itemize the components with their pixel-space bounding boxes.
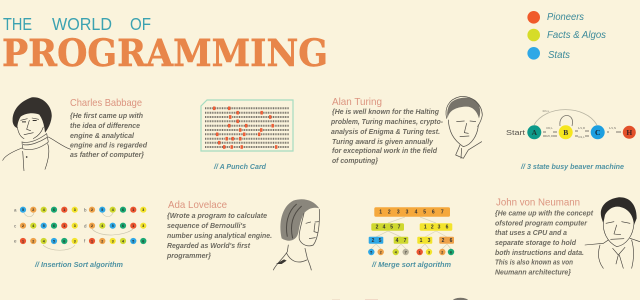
chart: insertion sort steps: 5 <box>22 208 24 212</box>
arrow: B self loop <box>560 116 573 126</box>
arrow: A to C arc <box>534 110 597 125</box>
chart: insertion sort steps: 4 <box>112 208 114 212</box>
chart: insertion sort steps: e <box>14 238 17 244</box>
chart: insertion sort steps: 4 <box>43 239 45 243</box>
transition labels: 1/1,N <box>609 126 616 130</box>
chart: merge sort tree: 2 <box>431 225 434 231</box>
state nodes <box>527 125 636 139</box>
chart: insertion sort steps: 4 <box>101 224 103 228</box>
chart: merge sort tree: 2 <box>388 210 391 216</box>
text block: Lovelace bio <box>166 211 272 260</box>
title: WORLD <box>52 14 112 34</box>
text block: Turing bio: problem, Turing machines, crypto- <box>330 117 443 126</box>
chart: merge sort tree: 1 <box>424 225 427 231</box>
chart: merge sort tree: 5 <box>423 210 426 216</box>
chart: insertion sort steps: 1 <box>132 224 134 228</box>
icon: portrait of Turing <box>446 97 482 158</box>
chart: merge sort tree: 5 <box>390 225 393 231</box>
transition labels <box>543 109 616 139</box>
text block: Babbage bio: {He first came up with <box>70 111 143 120</box>
panel: Charles Babbage <box>3 97 147 171</box>
text block: Lovelace bio: number using analytical engine. <box>167 231 272 240</box>
chart: merge sort tree: 7 <box>405 250 407 254</box>
chart: insertion sort steps: 6 <box>63 239 65 243</box>
chart: merge sort tree: 7 <box>441 210 444 216</box>
chart: merge sort tree: 3 <box>406 210 409 216</box>
panel: busy beaver machine <box>506 109 636 171</box>
chart: merge sort tree: 2 <box>380 250 382 254</box>
caption: busy beaver: // 3 state busy beaver machine <box>520 162 625 171</box>
chart: insertion sort steps: 2 <box>22 224 24 228</box>
heading: Ada Lovelace: Ada Lovelace <box>168 199 227 211</box>
chart: insertion sort steps: 5 <box>43 224 45 228</box>
caption: merge sort: // Merge sort algorithm <box>371 260 451 269</box>
text block: Lovelace bio: sequence of Bernoulli's <box>167 221 247 230</box>
chart: insertion sort steps: 4 <box>122 239 124 243</box>
chart: merge sort tree: 5 <box>370 250 372 254</box>
chart: insertion sort steps: 6 <box>122 208 124 212</box>
chart: merge sort tree: 4 <box>395 250 397 254</box>
text block: Lovelace bio: Regarded as World's first <box>167 241 250 250</box>
heading: Alan Turing: Alan Turing <box>332 96 382 108</box>
text block: Babbage bio: engine and is regarded <box>70 140 147 150</box>
text block: von Neumann bio: ofstored program computer <box>495 218 588 228</box>
chart: merge sort tree: 2 <box>441 250 443 254</box>
chart: insertion sort steps: f <box>84 238 86 244</box>
chart: insertion sort steps: a <box>14 208 17 212</box>
chart: insertion sort steps: 1 <box>132 208 134 212</box>
text block: von Neumann bio <box>495 208 593 276</box>
text block: Turing bio: {He is well known for the Halting <box>332 107 439 116</box>
text block: Lovelace bio: {Wrote a program to calculate <box>167 211 268 220</box>
chart: insertion sort steps: c <box>14 224 17 228</box>
panel: Ada Lovelace <box>166 199 319 270</box>
chart: insertion sort steps: 2 <box>91 208 93 212</box>
chart: insertion sort steps: 1 <box>91 239 93 243</box>
chart: insertion sort steps: 6 <box>122 224 124 228</box>
text block: von Neumann bio: both instructions and data. <box>495 248 584 257</box>
chart: insertion sort steps <box>14 207 146 250</box>
text block: von Neumann bio: {He came up with the concept <box>495 208 593 218</box>
text block: von Neumann bio: Neumann architecture} <box>495 268 571 276</box>
chart: insertion sort steps: 2 <box>91 224 93 228</box>
transition labels: 1/1,R <box>578 126 586 130</box>
icon: punch card <box>201 100 293 151</box>
transition labels: 0/1,L <box>543 109 550 113</box>
transition labels: 0/1,L <box>578 135 585 139</box>
panel: John von Neumann <box>495 196 640 276</box>
chart: insertion sort steps: 6 <box>53 208 55 212</box>
chart: insertion sort steps: 2 <box>32 239 34 243</box>
chart: merge sort tree: 6 <box>450 250 452 254</box>
chart: merge sort tree: 6 <box>432 210 435 216</box>
chart: insertion sort steps: 3 <box>74 208 76 212</box>
legend <box>527 11 606 61</box>
chart: merge sort tree: 2 <box>372 238 375 244</box>
state nodes: B <box>563 128 568 137</box>
legend: Pioneers <box>547 12 584 23</box>
state nodes: A <box>532 128 538 137</box>
panel: punch card <box>201 100 293 171</box>
legend: Stats <box>548 50 570 61</box>
chart: merge sort tree: 3 <box>428 238 431 244</box>
chart: insertion sort steps: 2 <box>32 208 34 212</box>
chart: merge sort tree: 4 <box>396 238 399 244</box>
chart: merge sort tree: 6 <box>450 238 453 244</box>
chart: insertion sort steps: 1 <box>63 224 65 228</box>
next section: partial heading and portrait cut off at the bottom edge <box>332 298 468 300</box>
heading: John von Neumann: John von Neumann <box>496 196 580 208</box>
chart: insertion sort steps: b <box>84 208 87 212</box>
chart: insertion sort steps: 3 <box>74 239 76 243</box>
legend: Facts & Algos <box>547 30 606 41</box>
transitions <box>543 131 621 136</box>
caption: insertion sort: // Insertion Sort algorithm <box>34 260 123 269</box>
chart: merge sort tree: 1 <box>420 238 423 244</box>
text block: Babbage bio: the idea of difference <box>70 121 141 130</box>
text block: Turing bio: analysis of Enigma & Turing test. <box>331 127 440 136</box>
chart: insertion sort steps: d <box>84 224 87 228</box>
chart: merge sort tree: 2 <box>442 238 445 244</box>
transition labels: 0/0,R <box>546 134 554 138</box>
chart: merge sort tree: 3 <box>397 210 400 216</box>
chart: merge sort tree: 6 <box>446 225 449 231</box>
chart: insertion sort steps: 2 <box>101 239 103 243</box>
chart: merge sort tree: 5 <box>379 238 382 244</box>
chart: insertion sort steps: 3 <box>142 224 144 228</box>
chart: insertion sort steps: 3 <box>74 224 76 228</box>
chart: merge sort tree: 7 <box>398 225 401 231</box>
title <box>2 14 328 75</box>
text block: Babbage bio <box>70 111 147 159</box>
chart: merge sort tree: 7 <box>404 238 407 244</box>
text block: Lovelace bio: programmer} <box>166 251 211 260</box>
text block: Turing bio: Turing award is given annually <box>332 137 434 146</box>
panel: insertion sort <box>14 207 146 269</box>
chart: insertion sort steps: 5 <box>53 239 55 243</box>
text block: Turing bio: of computing} <box>332 156 378 165</box>
chart: insertion sort steps: 4 <box>32 224 34 228</box>
icon: portrait of Ada Lovelace <box>273 199 319 270</box>
chart: insertion sort steps: 3 <box>112 239 114 243</box>
chart: merge sort tree: 1 <box>379 210 382 216</box>
icon: portrait of von Neumann <box>585 197 640 268</box>
chart: merge sort tree <box>368 207 454 255</box>
chart: insertion sort steps: 6 <box>142 239 144 243</box>
text block: Babbage bio: engine & analytical <box>70 131 135 140</box>
icon: portrait of Babbage <box>3 97 71 171</box>
text block: von Neumann bio: separate storage to hold <box>495 238 576 247</box>
state nodes: C <box>595 128 600 137</box>
title: THE <box>3 14 32 34</box>
chart: insertion sort steps: 3 <box>142 208 144 212</box>
chart: insertion sort steps: 1 <box>63 208 65 212</box>
chart: insertion sort steps: 5 <box>112 224 114 228</box>
label: Start: Start <box>506 128 526 137</box>
text block: Babbage bio: as father of computer} <box>70 150 144 159</box>
chart: merge sort tree: 2 <box>376 225 379 231</box>
chart: insertion sort steps: 4 <box>43 208 45 212</box>
caption: punch card: // A Punch Card <box>213 162 266 171</box>
panel: Alan Turing <box>330 96 482 165</box>
state nodes: H <box>626 128 632 137</box>
chart: merge sort tree: 3 <box>428 250 430 254</box>
chart: insertion sort steps: 6 <box>53 224 55 228</box>
chart: insertion sort steps: 1 <box>22 239 24 243</box>
text block: Turing bio: for exceptional work in the field <box>332 146 437 155</box>
title: PROGRAMMING <box>2 31 328 75</box>
text block: von Neumann bio: This is also known as von <box>495 258 573 267</box>
heading: Charles Babbage: Charles Babbage <box>70 97 142 109</box>
text block: Turing bio <box>330 107 443 165</box>
chart: insertion sort steps: 5 <box>101 208 103 212</box>
chart: insertion sort steps: 5 <box>132 239 134 243</box>
title: OF <box>130 14 151 34</box>
transition labels: 0/0,L <box>546 126 553 130</box>
chart: merge sort tree: 3 <box>438 225 441 231</box>
chart: merge sort tree: 1 <box>419 250 421 254</box>
chart: merge sort tree: 4 <box>383 225 386 231</box>
chart: merge sort tree: 4 <box>415 210 418 216</box>
text block: von Neumann bio: that uses a CPU and a <box>495 228 568 237</box>
panel: merge sort <box>368 207 454 269</box>
